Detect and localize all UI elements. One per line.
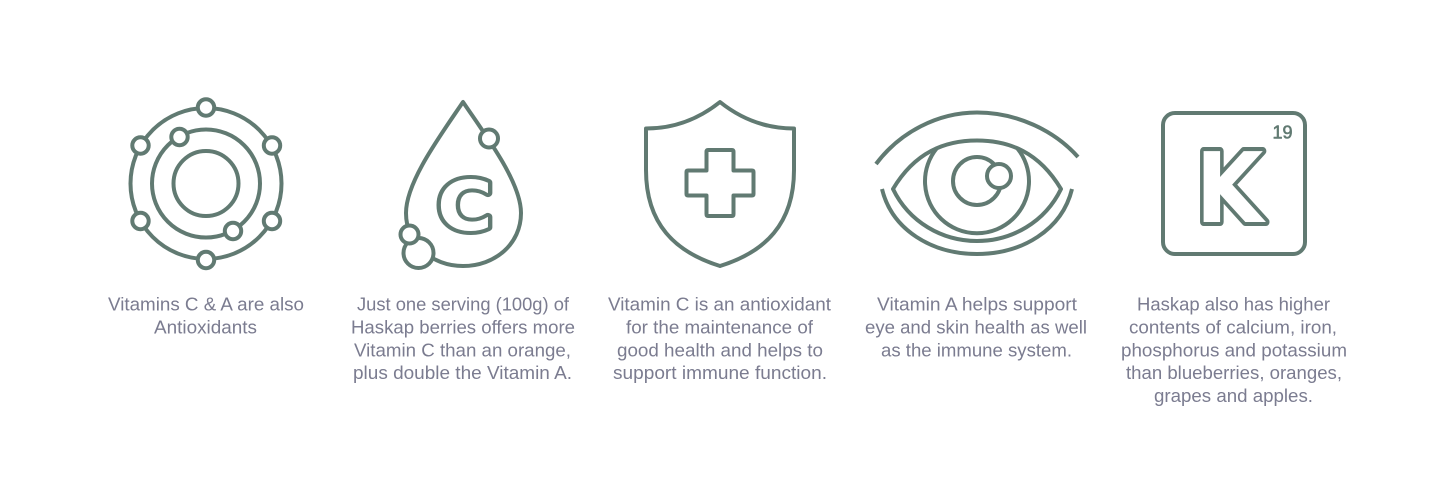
text: antioxidants: Antioxidants xyxy=(154,318,257,338)
text: minerals: grapes and apples. xyxy=(1154,386,1313,406)
icon: atom xyxy=(130,99,282,268)
text: one serving: Haskap berries offers more xyxy=(351,318,575,338)
text: vitamin A: eye and skin health as well xyxy=(865,318,1087,338)
icon: potassium element tile: 19 xyxy=(1272,122,1293,142)
text: minerals xyxy=(1121,294,1347,406)
text: minerals: phosphorus and potassium xyxy=(1121,340,1347,360)
text: one serving xyxy=(351,294,575,383)
text: vitamin A: Vitamin A helps support xyxy=(877,294,1077,314)
text: antioxidants: Vitamins C & A are also xyxy=(108,294,304,314)
icon: vitamin C drop xyxy=(400,102,521,268)
icon: potassium element tile xyxy=(1163,113,1305,254)
icon: shield with cross xyxy=(646,102,794,266)
text: vitamin C: Vitamin C is an antioxidant xyxy=(608,294,831,314)
text: vitamin C xyxy=(608,294,831,383)
icon: potassium element tile: K xyxy=(1196,132,1267,245)
text: vitamin C: for the maintenance of xyxy=(626,318,814,338)
text: one serving: plus double the Vitamin A. xyxy=(353,363,572,383)
text: one serving: Just one serving (100g) of xyxy=(357,294,570,314)
text: vitamin A: as the immune system. xyxy=(881,340,1072,360)
text: vitamin A xyxy=(865,294,1087,360)
icon: eye xyxy=(876,112,1078,254)
text: one serving: Vitamin C than an orange, xyxy=(354,340,571,360)
text: antioxidants xyxy=(108,294,304,338)
text: minerals: than blueberries, oranges, xyxy=(1126,363,1342,383)
text: minerals: Haskap also has higher xyxy=(1137,294,1330,314)
icon: vitamin C drop: C xyxy=(437,167,493,247)
text: vitamin C: support immune function. xyxy=(613,363,827,383)
text: minerals: contents of calcium, iron, xyxy=(1129,318,1337,338)
text: vitamin C: good health and helps to xyxy=(617,340,823,360)
